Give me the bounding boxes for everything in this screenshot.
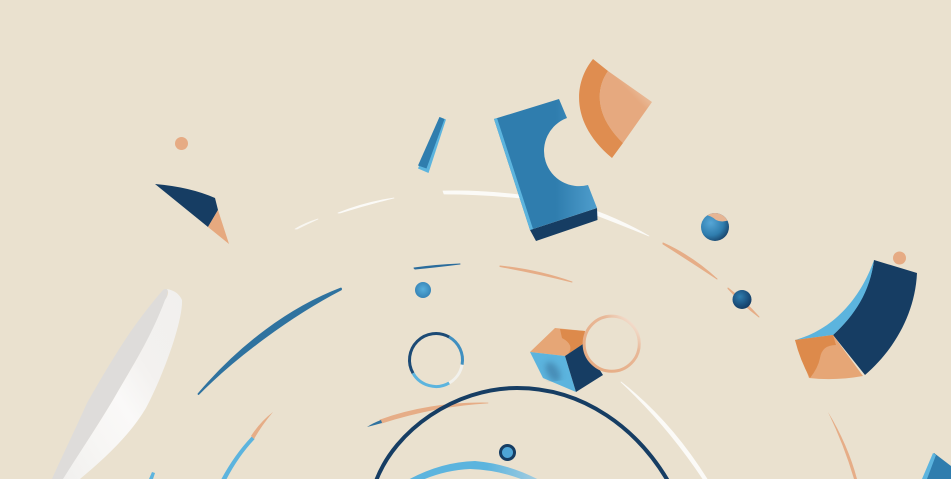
peach ring over cube bbox=[584, 316, 639, 371]
blue ball with peach cap bbox=[701, 212, 729, 241]
white dashed orbit strokes bbox=[295, 191, 649, 236]
peach dot right bbox=[893, 252, 906, 264]
dark blue ball bbox=[732, 290, 752, 309]
left wedge shape bbox=[155, 184, 229, 244]
small navy ring with blue centre bbox=[500, 446, 514, 460]
small blue ball bbox=[415, 282, 431, 298]
blue corner shape bbox=[922, 453, 951, 479]
blue notched block bbox=[494, 99, 598, 241]
blue long arc bbox=[198, 288, 341, 394]
peach and blue arc bbox=[367, 403, 488, 427]
peach dot left bbox=[175, 137, 188, 150]
peach stroke lower right bbox=[828, 412, 857, 479]
cube bbox=[530, 328, 603, 392]
navy short stroke bbox=[414, 264, 460, 269]
peach orbit strokes bbox=[500, 243, 759, 317]
white curved stroke bbox=[621, 382, 707, 479]
blue stick bbox=[418, 117, 446, 173]
large navy arc bbox=[376, 388, 668, 479]
orange fan bbox=[579, 59, 652, 158]
small light blue stroke bbox=[149, 472, 155, 479]
light blue bottom arc bbox=[406, 461, 541, 479]
multicolour ring bbox=[409, 333, 463, 387]
white disc bbox=[52, 289, 182, 479]
curved block right bbox=[795, 260, 917, 379]
peach stroke tip bbox=[251, 412, 273, 439]
light blue arc lower left bbox=[222, 437, 254, 479]
